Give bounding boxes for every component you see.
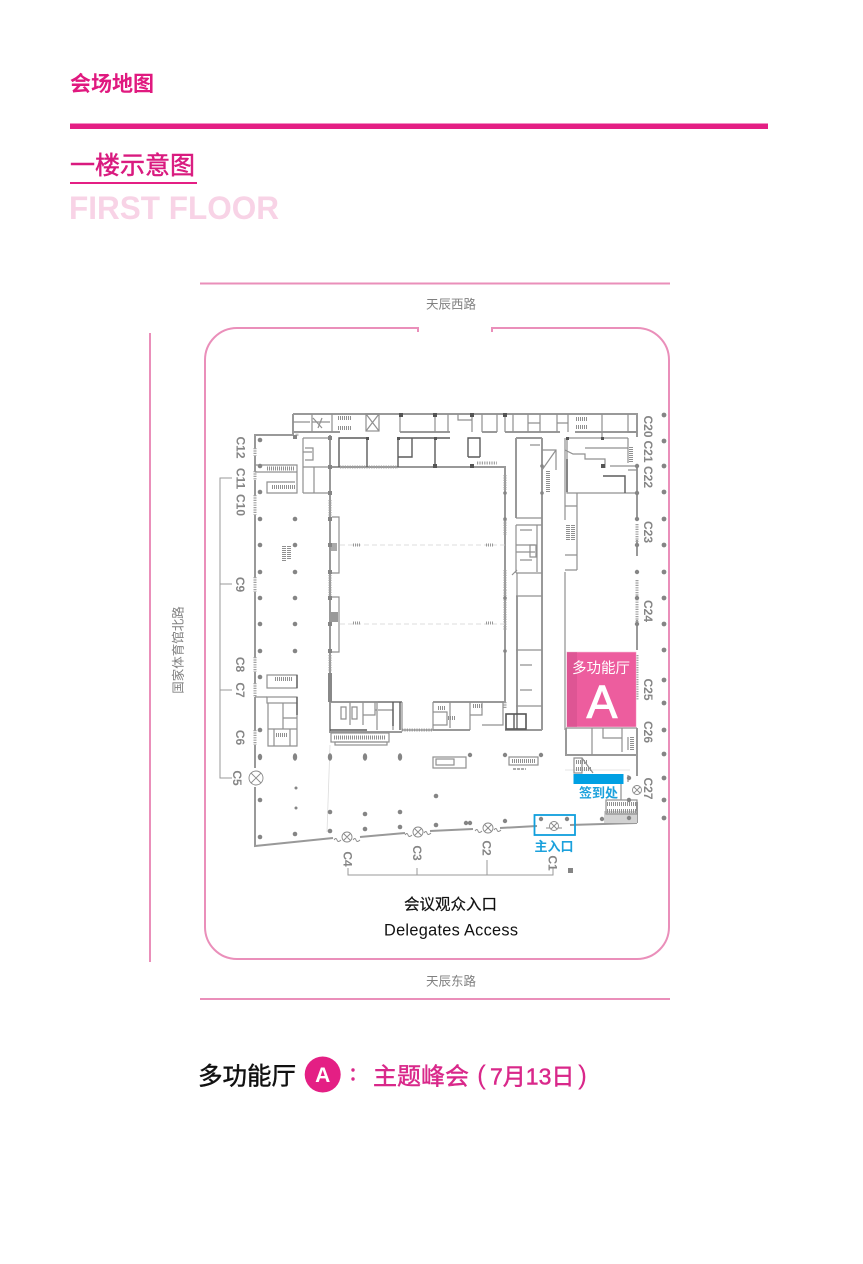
gate labels: C21	[641, 440, 655, 463]
gate labels	[230, 415, 655, 871]
gate labels: C8	[233, 657, 247, 672]
road label: National Stadium North Road: 国家体育馆北路	[170, 606, 186, 694]
escalator	[331, 733, 389, 745]
bottom legend	[198, 1056, 587, 1092]
venue outline	[205, 328, 669, 959]
gate labels: C2	[480, 840, 494, 856]
north-east rooms	[565, 437, 637, 493]
bottom legend: A	[315, 1064, 330, 1087]
bottom legend: 多功能厅	[198, 1062, 296, 1090]
multifunction hall west wall and stairs	[565, 438, 577, 730]
road label: Tianchen West Road: 天辰西路	[426, 296, 476, 312]
delegates access label: 会议观众入口	[404, 896, 497, 914]
revolving doors	[249, 771, 642, 842]
page heading: venue map: 会场地图	[70, 73, 154, 96]
registration label: 签到处	[579, 786, 618, 800]
gate labels: C22	[641, 466, 655, 488]
section title: first floor plan: 一楼示意图	[70, 152, 195, 180]
road line: west	[149, 333, 151, 962]
road label: Tianchen East Road: 天辰东路	[426, 974, 476, 988]
south-east rooms and stairs	[566, 728, 637, 823]
gate labels: C26	[641, 721, 655, 743]
heading bar	[70, 124, 768, 129]
south core restrooms	[330, 702, 503, 730]
entrance labels bracket: west	[220, 478, 232, 778]
highlighted hall A	[567, 652, 636, 728]
top band rooms and stairs	[293, 414, 637, 438]
west hall stair	[284, 546, 289, 562]
outer walls	[255, 414, 637, 846]
bottom legend: 7月13日	[490, 1064, 574, 1090]
entrance labels bracket: south	[348, 860, 553, 875]
gate labels: C12	[234, 436, 248, 459]
delegates access english label: Delegates Access	[384, 922, 518, 940]
south-west core	[255, 675, 297, 746]
registration bar	[574, 774, 624, 784]
bottom legend: )	[578, 1060, 587, 1090]
gate labels: C23	[641, 521, 655, 543]
gate labels: C4	[340, 851, 354, 867]
gate labels: C5	[230, 770, 244, 786]
gate labels: C24	[641, 600, 655, 622]
column dots	[258, 413, 666, 873]
door symbols	[255, 432, 637, 745]
bottom legend: (	[477, 1060, 486, 1090]
highlighted hall A: A	[587, 676, 618, 728]
gate labels: C7	[233, 682, 247, 698]
second row rooms	[339, 413, 507, 468]
gate labels: C20	[641, 415, 655, 438]
main entrance highlight	[534, 815, 575, 835]
highlighted hall A: 多功能厅	[572, 660, 630, 677]
gate labels: C3	[410, 845, 424, 861]
road line: north	[200, 282, 670, 284]
English section title: FIRST FLOOR	[69, 190, 279, 226]
gate labels: C1	[546, 855, 560, 871]
east service corridor rooms	[506, 438, 556, 730]
floor plan	[249, 413, 666, 873]
gate labels: C9	[233, 577, 247, 592]
gate labels: C25	[641, 678, 655, 701]
central hall side rooms	[328, 517, 339, 702]
gate labels: C27	[641, 777, 655, 800]
road line: south	[200, 998, 670, 1000]
gate labels: C11	[234, 468, 248, 489]
north-west core rooms	[255, 438, 330, 493]
gate labels: C6	[233, 730, 247, 745]
bottom legend: 主题峰会	[373, 1064, 469, 1090]
main entrance label: 主入口	[534, 839, 574, 854]
gate labels: C10	[234, 494, 248, 516]
central hall dashed axes	[340, 545, 505, 624]
title underline	[70, 182, 197, 184]
lobby kiosks	[327, 745, 630, 832]
